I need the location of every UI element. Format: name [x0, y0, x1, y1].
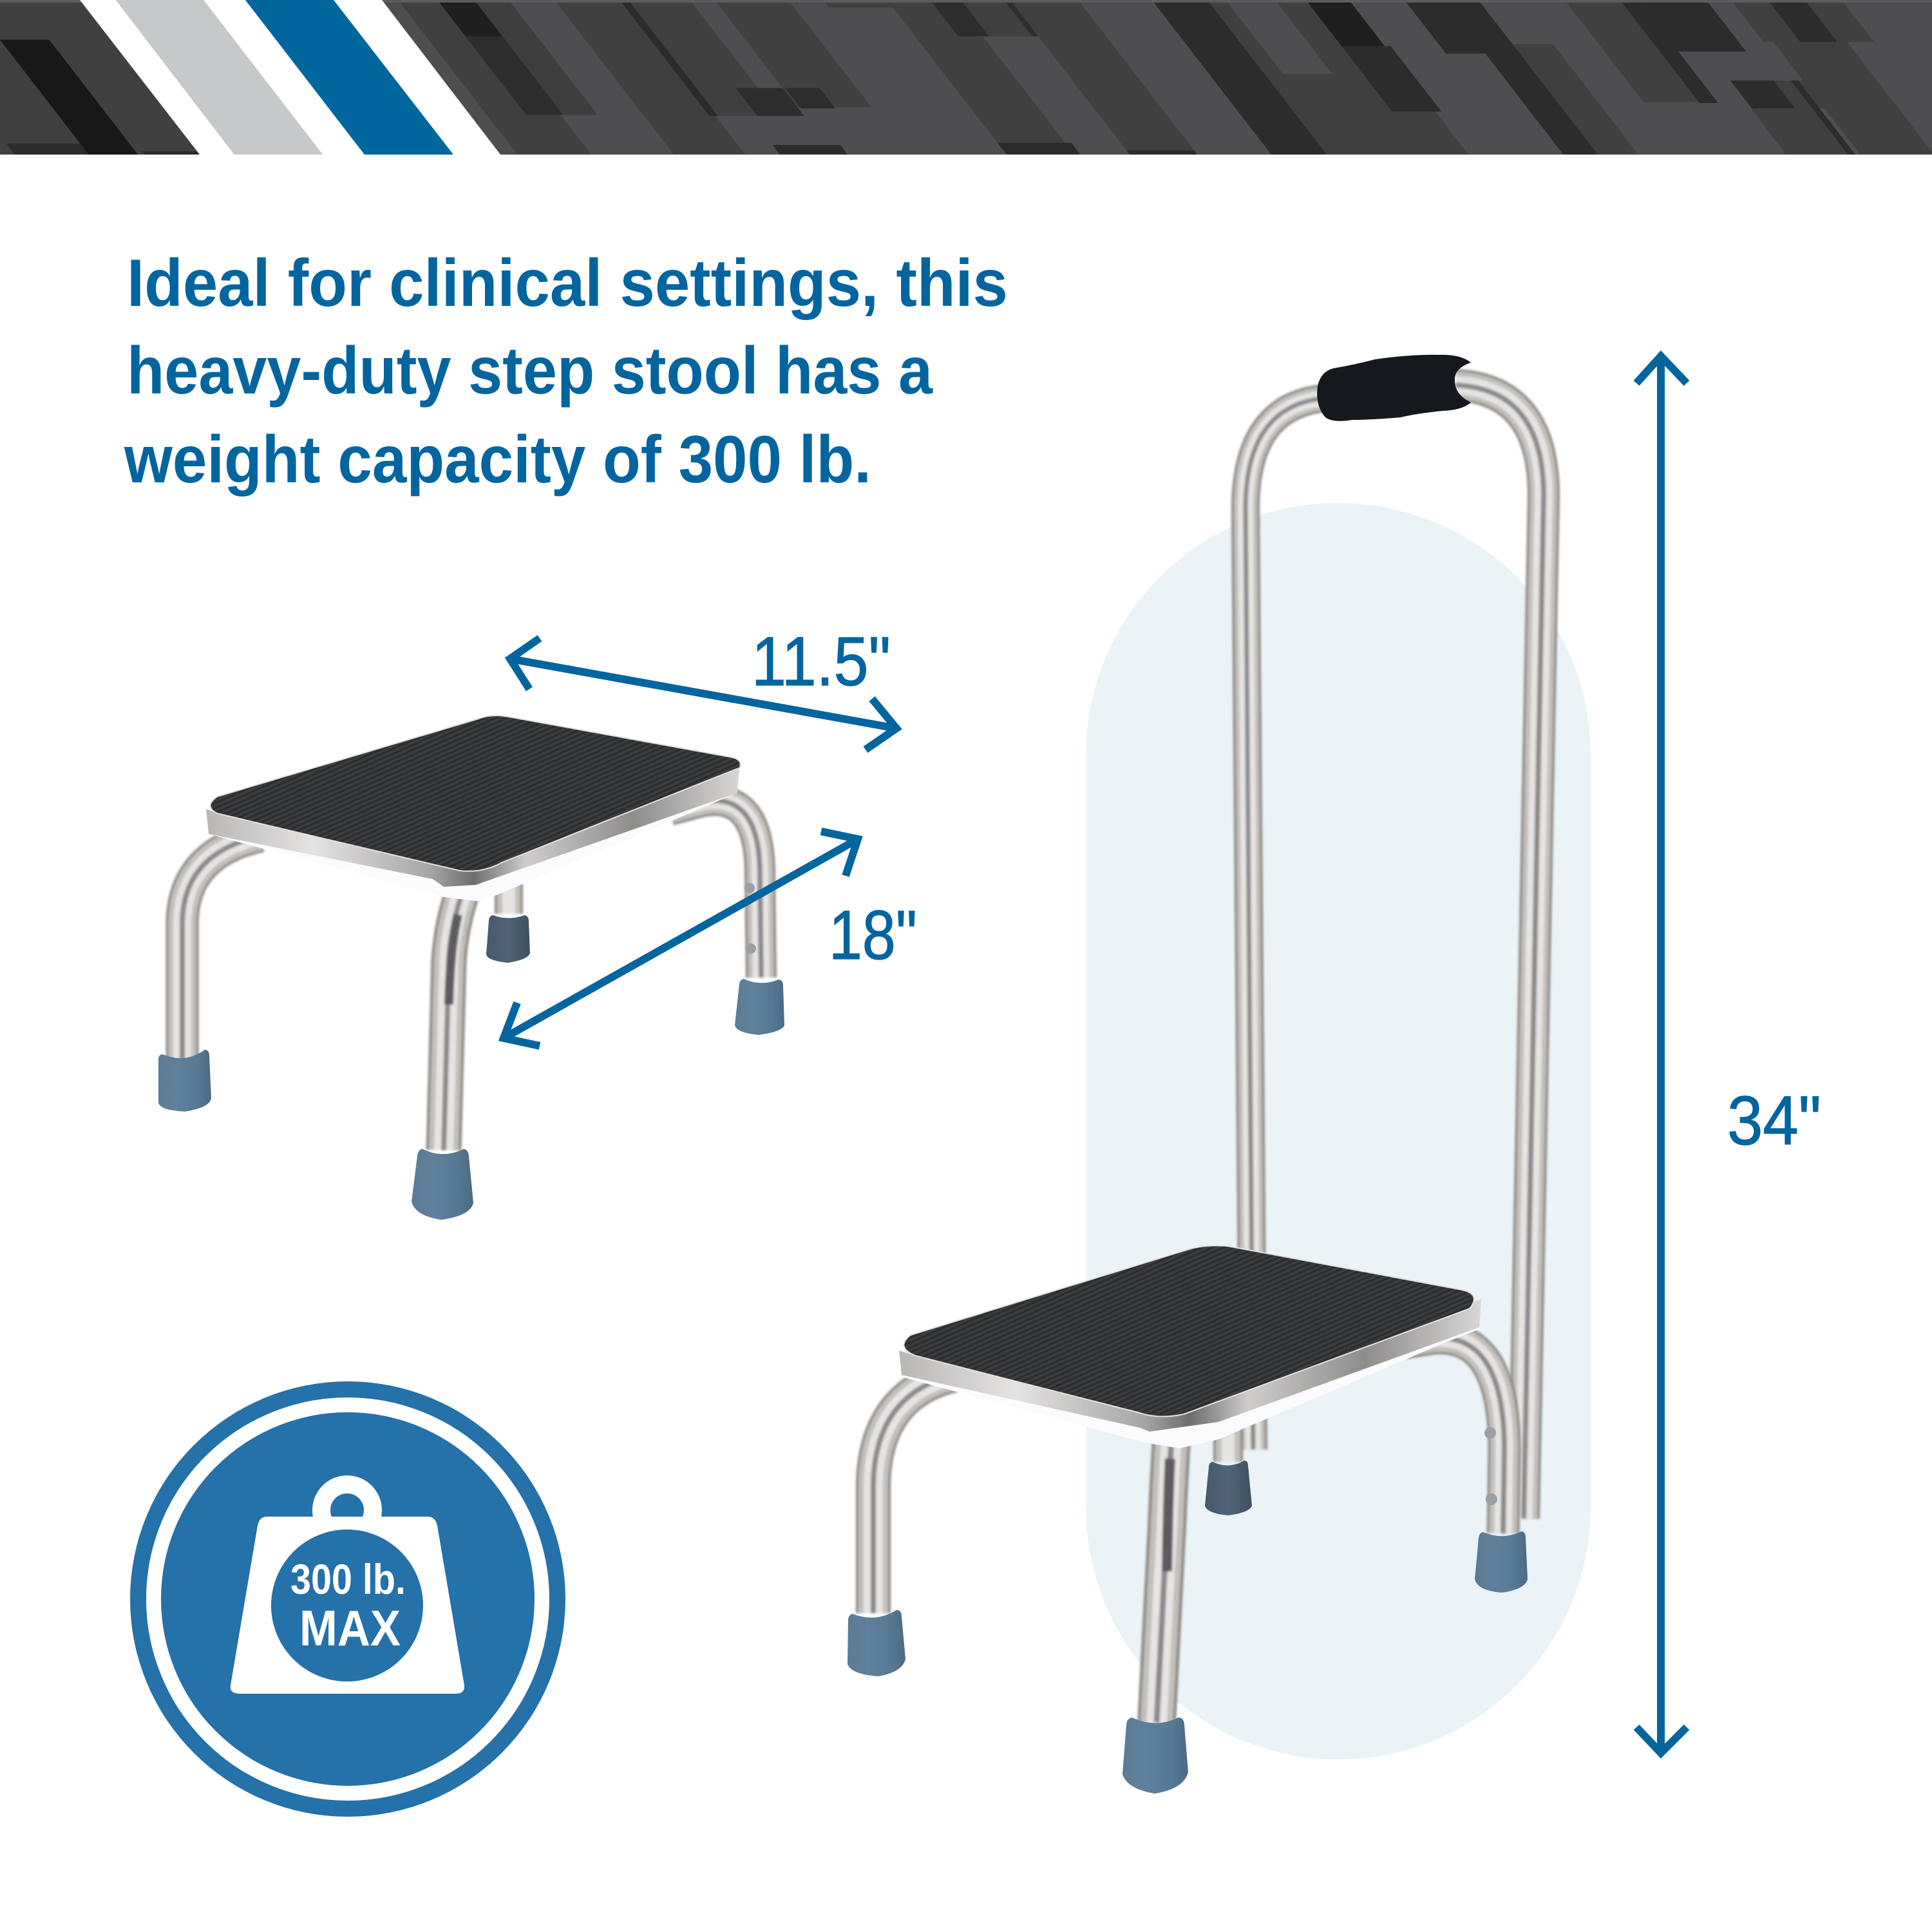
arrow: 11.5 inch width — [510, 638, 896, 750]
label: 18 inch: 18" — [829, 896, 917, 974]
headline text — [124, 246, 1008, 497]
header banner — [0, 0, 1932, 155]
weight capacity badge: 300 lb. — [290, 1555, 406, 1603]
small step stool photo — [158, 715, 784, 1220]
headline text: weight capacity of 300 lb. — [124, 422, 871, 497]
headline text: Ideal for clinical settings, this — [127, 246, 1008, 321]
headline text: heavy-duty step stool has a — [127, 334, 933, 408]
weight capacity badge — [130, 1381, 565, 1817]
label: 34 inch: 34" — [1727, 1081, 1821, 1159]
weight capacity badge: MAX — [299, 1600, 401, 1656]
pale blue pill backdrop — [1086, 503, 1591, 1759]
arrow: 34 inch height — [1636, 356, 1687, 1753]
arrow: 18 inch depth — [504, 831, 858, 1046]
label: 11.5 inch: 11.5" — [752, 622, 891, 700]
large step stool with handrail photo — [848, 355, 1544, 1794]
